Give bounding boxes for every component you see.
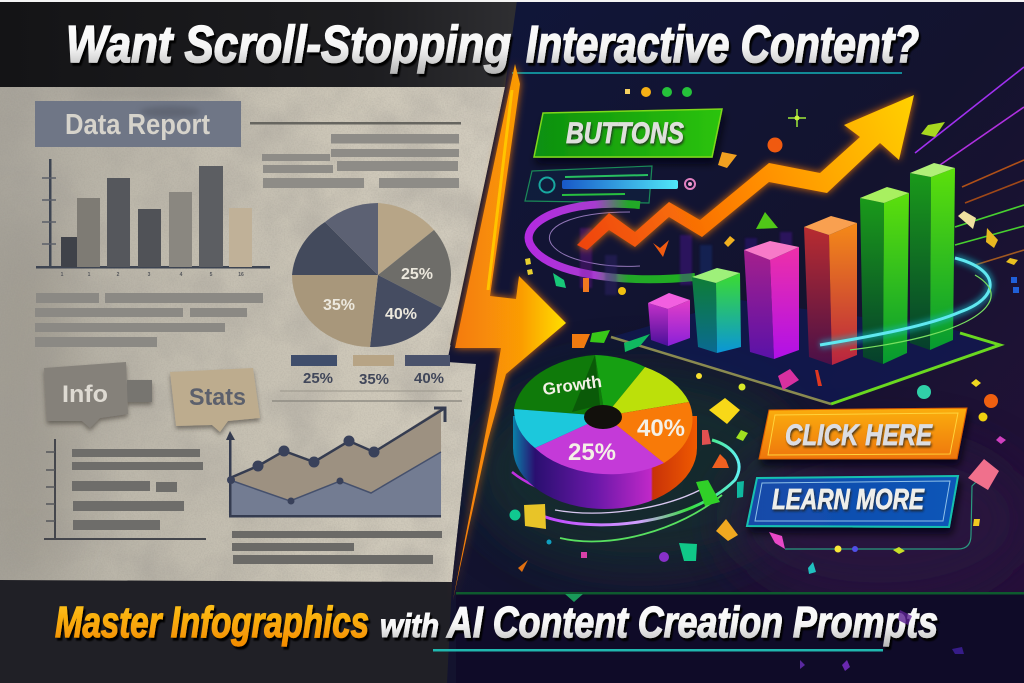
bar chart: 2 [117,272,120,278]
ghost bars behind arrow [580,228,792,295]
stats bubble: Stats [189,384,246,411]
bar chart: 3 [148,272,151,278]
stats bubble [170,368,260,432]
learn more button [747,476,958,527]
paper sheet [0,87,505,582]
subtitle: with [380,607,439,644]
pie legend: 40% [414,370,444,387]
rising arrow [577,95,914,250]
confetti [510,109,1019,671]
bar chart: 1 [88,272,91,278]
bottom dark band right [456,594,1024,683]
pie slices [514,355,605,416]
buttons label [534,109,722,157]
bottom dark band [0,580,480,683]
pie chart: 35% [323,297,355,314]
neon ring behind pie [512,472,625,498]
buttons label: BUTTONS [566,117,684,150]
teal swirl around bars [820,258,991,350]
glowing swirl under pie [540,440,739,541]
pie side [513,416,697,509]
title: Interactive Content? [526,16,919,74]
click here button: CLICK HERE [785,419,933,452]
pie chart: 25% [401,266,433,283]
bar chart: 1 [61,272,64,278]
bar 4 orange red [804,216,857,365]
circuit line [785,474,984,549]
bar 1 magenta [648,293,690,346]
bar chart: 16 [238,272,244,278]
sparkle [788,109,806,127]
data report heading: Data Report [65,109,210,141]
right panel: vibrant background [433,0,1024,683]
click here button [759,408,967,459]
top edge [0,0,1024,2]
bar 3 pink [744,241,799,359]
hole [584,405,622,429]
status dots [625,87,692,97]
paragraph bars under area chart [232,531,442,564]
progress widget [525,166,695,203]
bar 5 green [860,187,909,364]
pie chart 3D [512,355,697,509]
subtitle [55,598,938,647]
small horizontal bar chart [44,439,206,540]
text placeholder bars top right [250,122,461,188]
purple green swirl [529,204,695,279]
bar chart: 4 [180,272,183,278]
pie chart: 40% [385,306,417,323]
paragraph bars under bar chart [35,293,263,347]
info bubble: Info [62,381,108,408]
neon streaks [915,67,1024,265]
left panel: plain data report [0,0,530,683]
lightning bolt divider [453,64,566,600]
subtitle: Master Infographics [55,598,369,647]
pie labels: 25% [568,439,616,466]
info bubble [44,362,152,428]
bar 6 green [910,163,955,350]
area line chart [226,408,445,518]
bar chart: 5 [210,272,213,278]
title [66,16,919,74]
pie legend: 35% [359,371,389,388]
platform under bars [611,300,1000,404]
pie labels [541,372,685,466]
data report heading [35,101,241,147]
3D bar chart [648,163,955,365]
pie labels: 40% [637,415,685,442]
pie labels: Growth [541,372,603,399]
bar 2 green [692,268,741,353]
pie chart [292,203,451,347]
learn more button: LEARN MORE [772,484,925,516]
pie legend [272,355,462,401]
pie legend: 25% [303,370,333,387]
bar chart [36,159,270,278]
title: Want Scroll-Stopping [66,16,511,74]
